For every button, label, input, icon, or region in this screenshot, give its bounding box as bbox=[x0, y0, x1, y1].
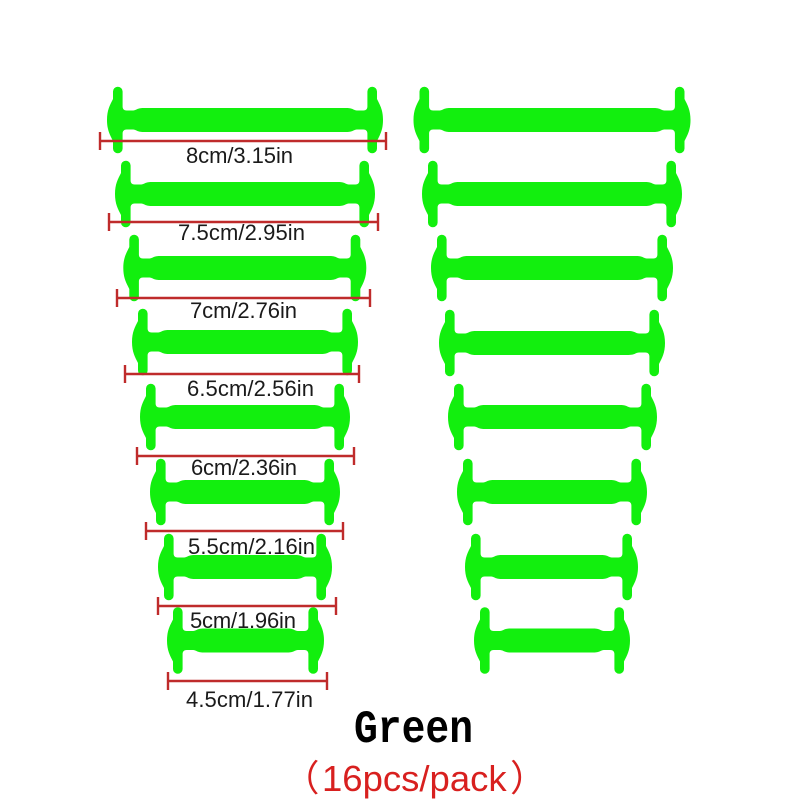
label 5.5cm: 5.5cm/2.16in bbox=[188, 534, 315, 559]
right lace 2 bbox=[422, 161, 682, 227]
subtitle: pack quantity: （ bbox=[283, 758, 320, 799]
dimension line 4.5cm bbox=[168, 672, 327, 690]
right lace 1 bbox=[414, 87, 690, 153]
label 6cm: 6cm/2.36in bbox=[191, 455, 297, 480]
label 5cm: 5cm/1.96in bbox=[190, 608, 296, 633]
dimension line 8cm bbox=[100, 132, 386, 150]
right lace 6 bbox=[457, 459, 647, 525]
lace 4.5cm bbox=[167, 607, 324, 674]
left column: measured laces bbox=[100, 87, 386, 712]
dimension line 7.5cm bbox=[109, 213, 378, 231]
label 7.5cm: 7.5cm/2.95in bbox=[178, 220, 305, 245]
dimension line 5.5cm bbox=[146, 522, 343, 540]
lace 5.5cm bbox=[150, 459, 340, 525]
right lace 4 bbox=[439, 310, 665, 376]
dimension line 6.5cm bbox=[125, 365, 359, 383]
lace 6.5cm bbox=[132, 309, 358, 375]
right lace 5 bbox=[448, 384, 657, 450]
lace 5cm bbox=[158, 534, 332, 600]
right lace 8 bbox=[474, 607, 630, 674]
lace 7cm bbox=[123, 235, 366, 301]
label 6.5cm: 6.5cm/2.56in bbox=[187, 376, 314, 401]
lace 6cm bbox=[140, 384, 350, 450]
lace 8cm bbox=[107, 87, 383, 153]
right lace 7 bbox=[465, 534, 638, 600]
label 7cm: 7cm/2.76in bbox=[190, 298, 297, 323]
title: colour name: Green bbox=[354, 704, 473, 756]
dimension line 6cm bbox=[137, 447, 354, 465]
label 4.5cm: 4.5cm/1.77in bbox=[186, 687, 313, 712]
lace 7.5cm bbox=[115, 161, 375, 227]
subtitle: pack quantity: ） bbox=[510, 758, 546, 799]
subtitle: pack quantity: 16pcs/pack bbox=[322, 758, 507, 799]
right column: unmeasured laces bbox=[414, 87, 690, 674]
right lace 3 bbox=[431, 235, 673, 301]
dimension line 7cm bbox=[117, 289, 370, 307]
label 8cm: 8cm/3.15in bbox=[186, 143, 293, 168]
dimension line 5cm bbox=[158, 597, 336, 615]
